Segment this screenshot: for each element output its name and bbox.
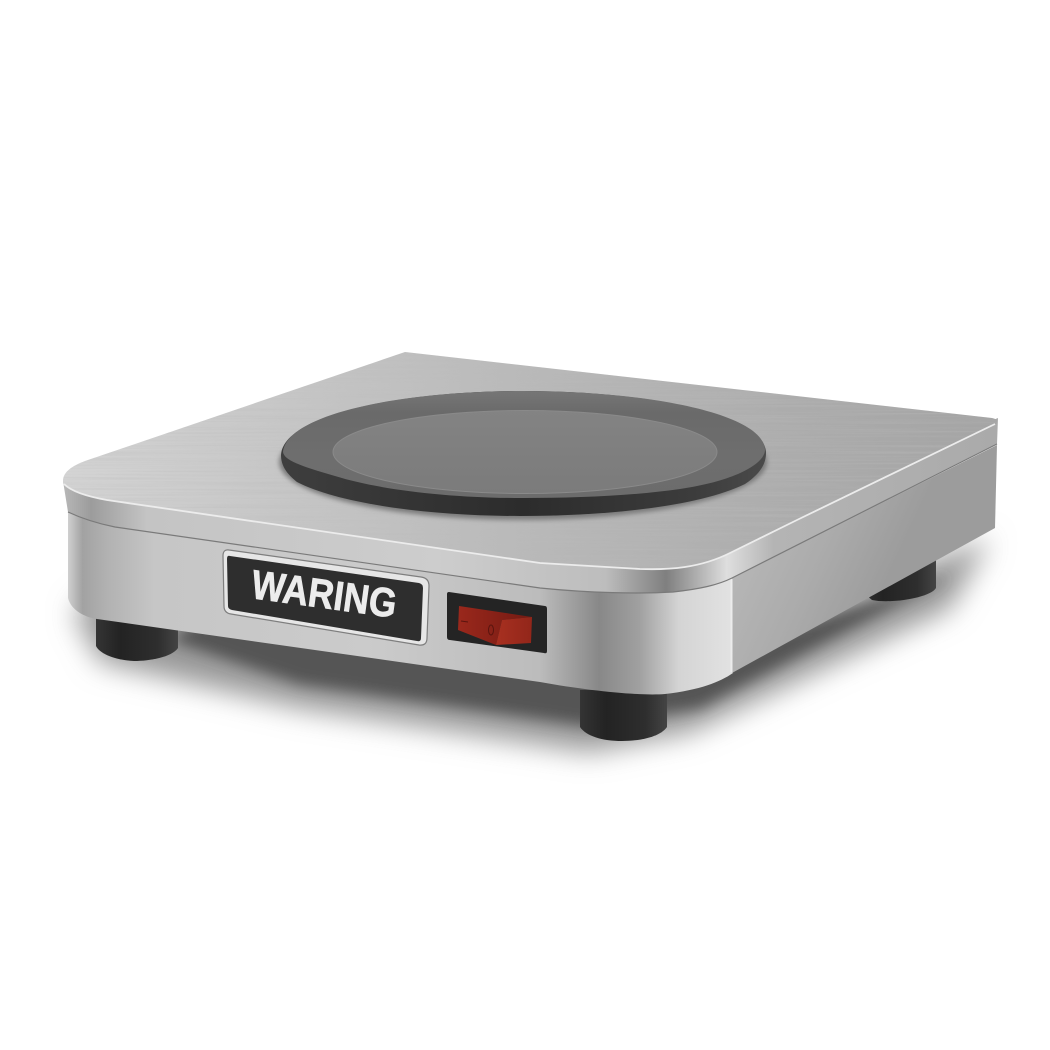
lid: folded lip [63,418,998,593]
lid lip shadow line [68,444,997,593]
badge frame [223,550,429,645]
warming plate [279,391,767,520]
rocker left half [458,606,532,645]
plate inner disc [333,410,717,494]
rocker on mark [461,621,468,622]
rocker off mark [488,625,494,635]
logo text: WARING [249,561,400,627]
side panel seam [730,579,732,672]
rocker switch [447,592,547,653]
body: right side panel [732,445,997,673]
foot: centre front [580,690,667,741]
body: front panel [68,510,733,694]
lid edge highlight [64,424,995,569]
switch bezel [447,592,547,653]
foot: right rear [860,560,936,601]
nameplate badge [223,550,429,645]
lid: top surface [63,352,997,569]
rocker right half [496,617,532,645]
lid: brushed metal grain [63,352,997,569]
badge black panel [227,556,423,641]
plate contact shadow [279,404,767,520]
plate outer band [281,391,766,516]
plate rim face [283,391,765,498]
foot: left front [96,615,178,661]
ground shadow [74,538,990,752]
